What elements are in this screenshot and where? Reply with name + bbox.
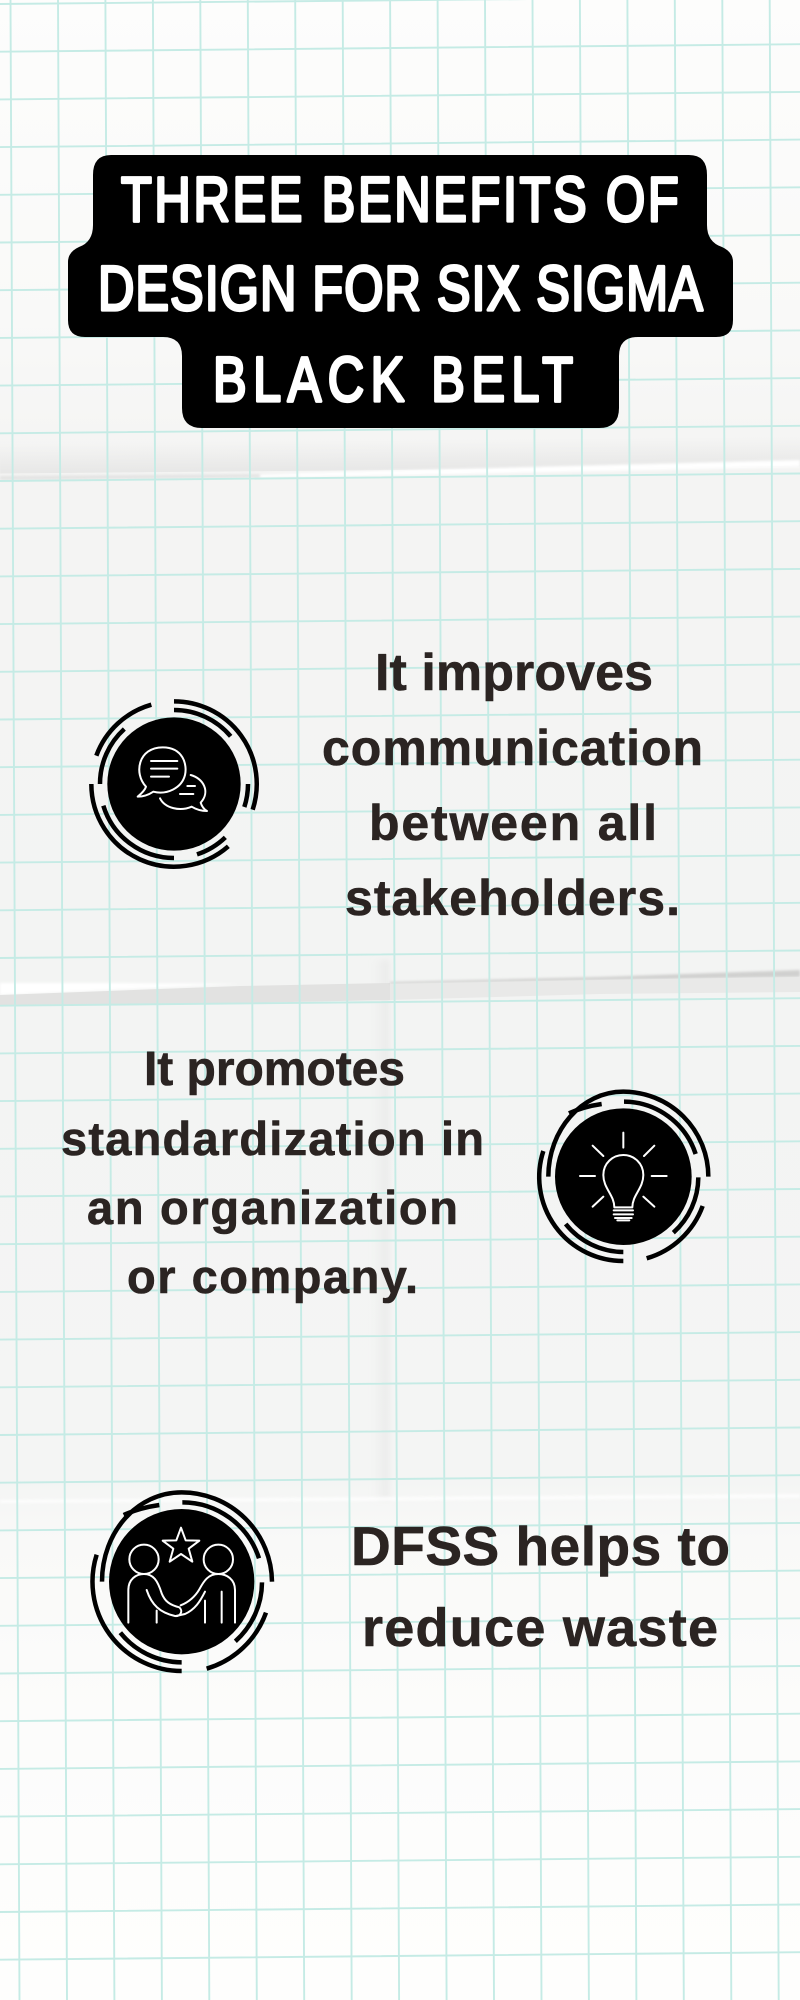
benefit 2 icon: light bulb [539,1092,708,1261]
title text: DESIGN FOR SIX SIGMA [98,254,703,324]
icon disk [555,1108,692,1245]
title banner [68,155,733,428]
title text: BLACK BELT [213,345,573,415]
icon ring arcs [91,701,257,867]
benefit 3 text: DFSS helps to [351,1515,730,1577]
handshake glyph [128,1528,235,1623]
icon disk [109,1509,254,1654]
benefit 1 text: communication [322,720,703,776]
benefit 2 text: or company. [127,1250,418,1303]
benefit 2 text: It promotes [144,1043,405,1096]
benefit 3 icon: handshake with star [92,1492,272,1671]
benefit 2 text: standardization in [61,1112,484,1165]
banner shape [68,155,733,428]
benefit 1 text: It improves [375,644,653,702]
benefit 2 text: an organization [87,1181,458,1234]
benefit 3 text [351,1515,730,1658]
speech bubble glyph [138,747,207,811]
light bulb glyph [580,1133,667,1220]
benefit 1 text: stakeholders. [345,870,680,926]
icon ring arcs [92,1492,272,1671]
title text: THREE BENEFITS OF [121,165,679,235]
benefit 3 text: reduce waste [362,1598,718,1658]
paper folds [0,437,800,1503]
benefit 1 icon: speech bubbles [91,701,257,867]
title text [98,165,703,415]
benefit 1 text [322,644,703,926]
benefit 2 text [61,1043,484,1303]
icon ring arcs [539,1092,708,1261]
benefit 1 text: between all [369,795,657,851]
icon disk [107,717,241,851]
